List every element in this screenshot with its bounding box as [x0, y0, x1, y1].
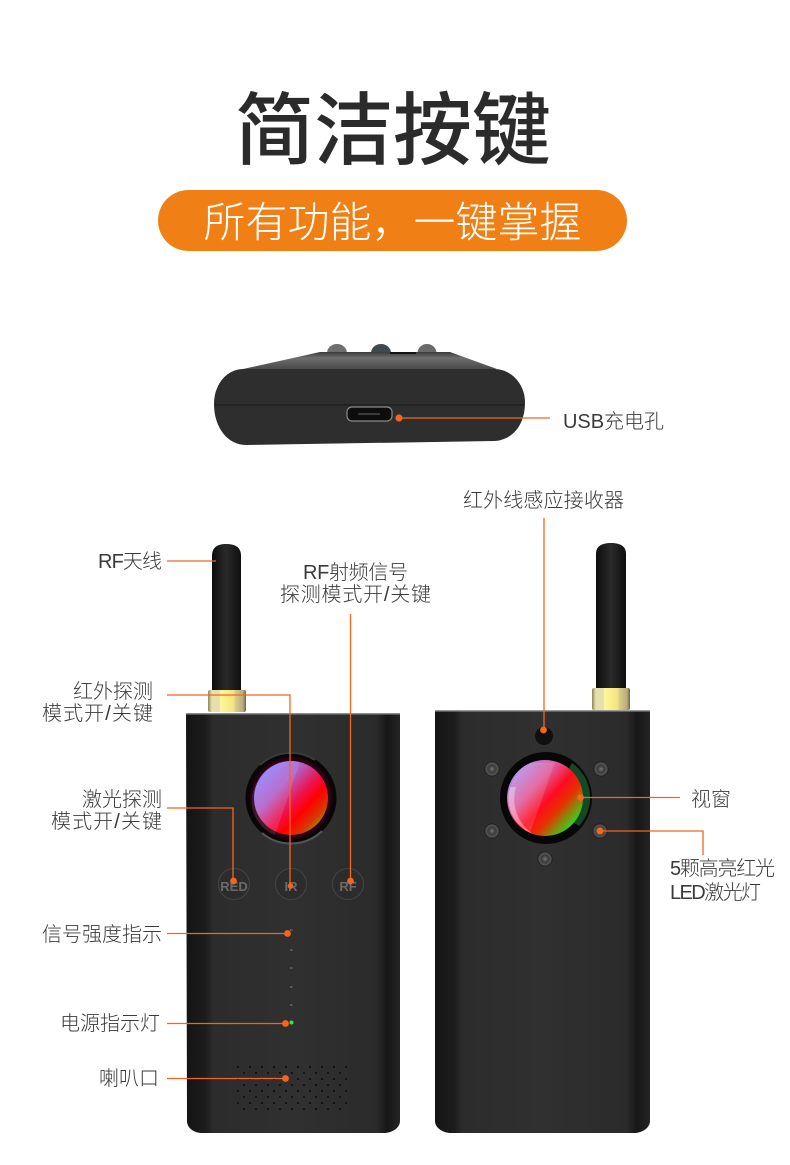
lens [246, 752, 336, 844]
antenna [208, 544, 246, 712]
label: RF signal detection key: RF射频信号 [303, 561, 408, 584]
label: signal strength indicator [42, 923, 291, 946]
label: RF signal detection key: 探测模式开/关键 [280, 583, 431, 606]
LED lights [484, 762, 608, 866]
antenna [592, 543, 630, 710]
lens [500, 752, 592, 844]
label: USB charging port [395, 410, 664, 433]
device: back view [435, 543, 650, 1133]
label: power indicator: 电源指示灯 [60, 1012, 160, 1035]
label: laser detection key: 模式开/关键 [51, 810, 162, 833]
label: speaker: 喇叭口 [99, 1067, 159, 1090]
buttons: RF [339, 879, 357, 894]
label: signal strength indicator: 信号强度指示 [42, 923, 162, 946]
label: IR detection mode key [42, 680, 293, 889]
label: 5 red LED lasers: 5颗高亮红光 [670, 857, 775, 880]
label: speaker [99, 1067, 289, 1090]
LED bumps [327, 344, 436, 362]
label: 5 red LED lasers: LED激光灯 [670, 881, 761, 904]
IR receiver [535, 727, 553, 745]
speaker holes [236, 1065, 348, 1110]
label: viewing window [577, 788, 731, 811]
signal indicators [290, 929, 294, 1024]
device: bottom USB view [214, 344, 525, 445]
title: 简洁按键 [235, 86, 551, 175]
label: 5 red LED lasers [596, 827, 775, 904]
label: power indicator [60, 1012, 289, 1035]
buttons: IR [284, 879, 298, 894]
label: IR detection mode key: 模式开/关键 [42, 702, 153, 725]
buttons [218, 868, 364, 900]
label: RF signal detection key [280, 561, 431, 884]
label: IR receiver [463, 489, 624, 733]
label: USB charging port: USB充电孔 [563, 410, 664, 433]
label: viewing window: 视窗 [691, 788, 731, 811]
label: IR receiver: 红外线感应接收器 [463, 489, 624, 512]
label: RF antenna: RF天线 [98, 550, 162, 573]
label: laser detection key: 激光探测 [82, 788, 162, 811]
subtitle pill [158, 190, 627, 251]
subtitle pill: 所有功能，一键掌握 [203, 199, 582, 246]
label: RF antenna [98, 550, 216, 573]
device: front view [186, 544, 400, 1133]
USB port [347, 407, 392, 421]
label: laser detection key [51, 788, 237, 884]
label: IR detection mode key: 红外探测 [73, 680, 153, 703]
buttons: RED [220, 879, 248, 894]
